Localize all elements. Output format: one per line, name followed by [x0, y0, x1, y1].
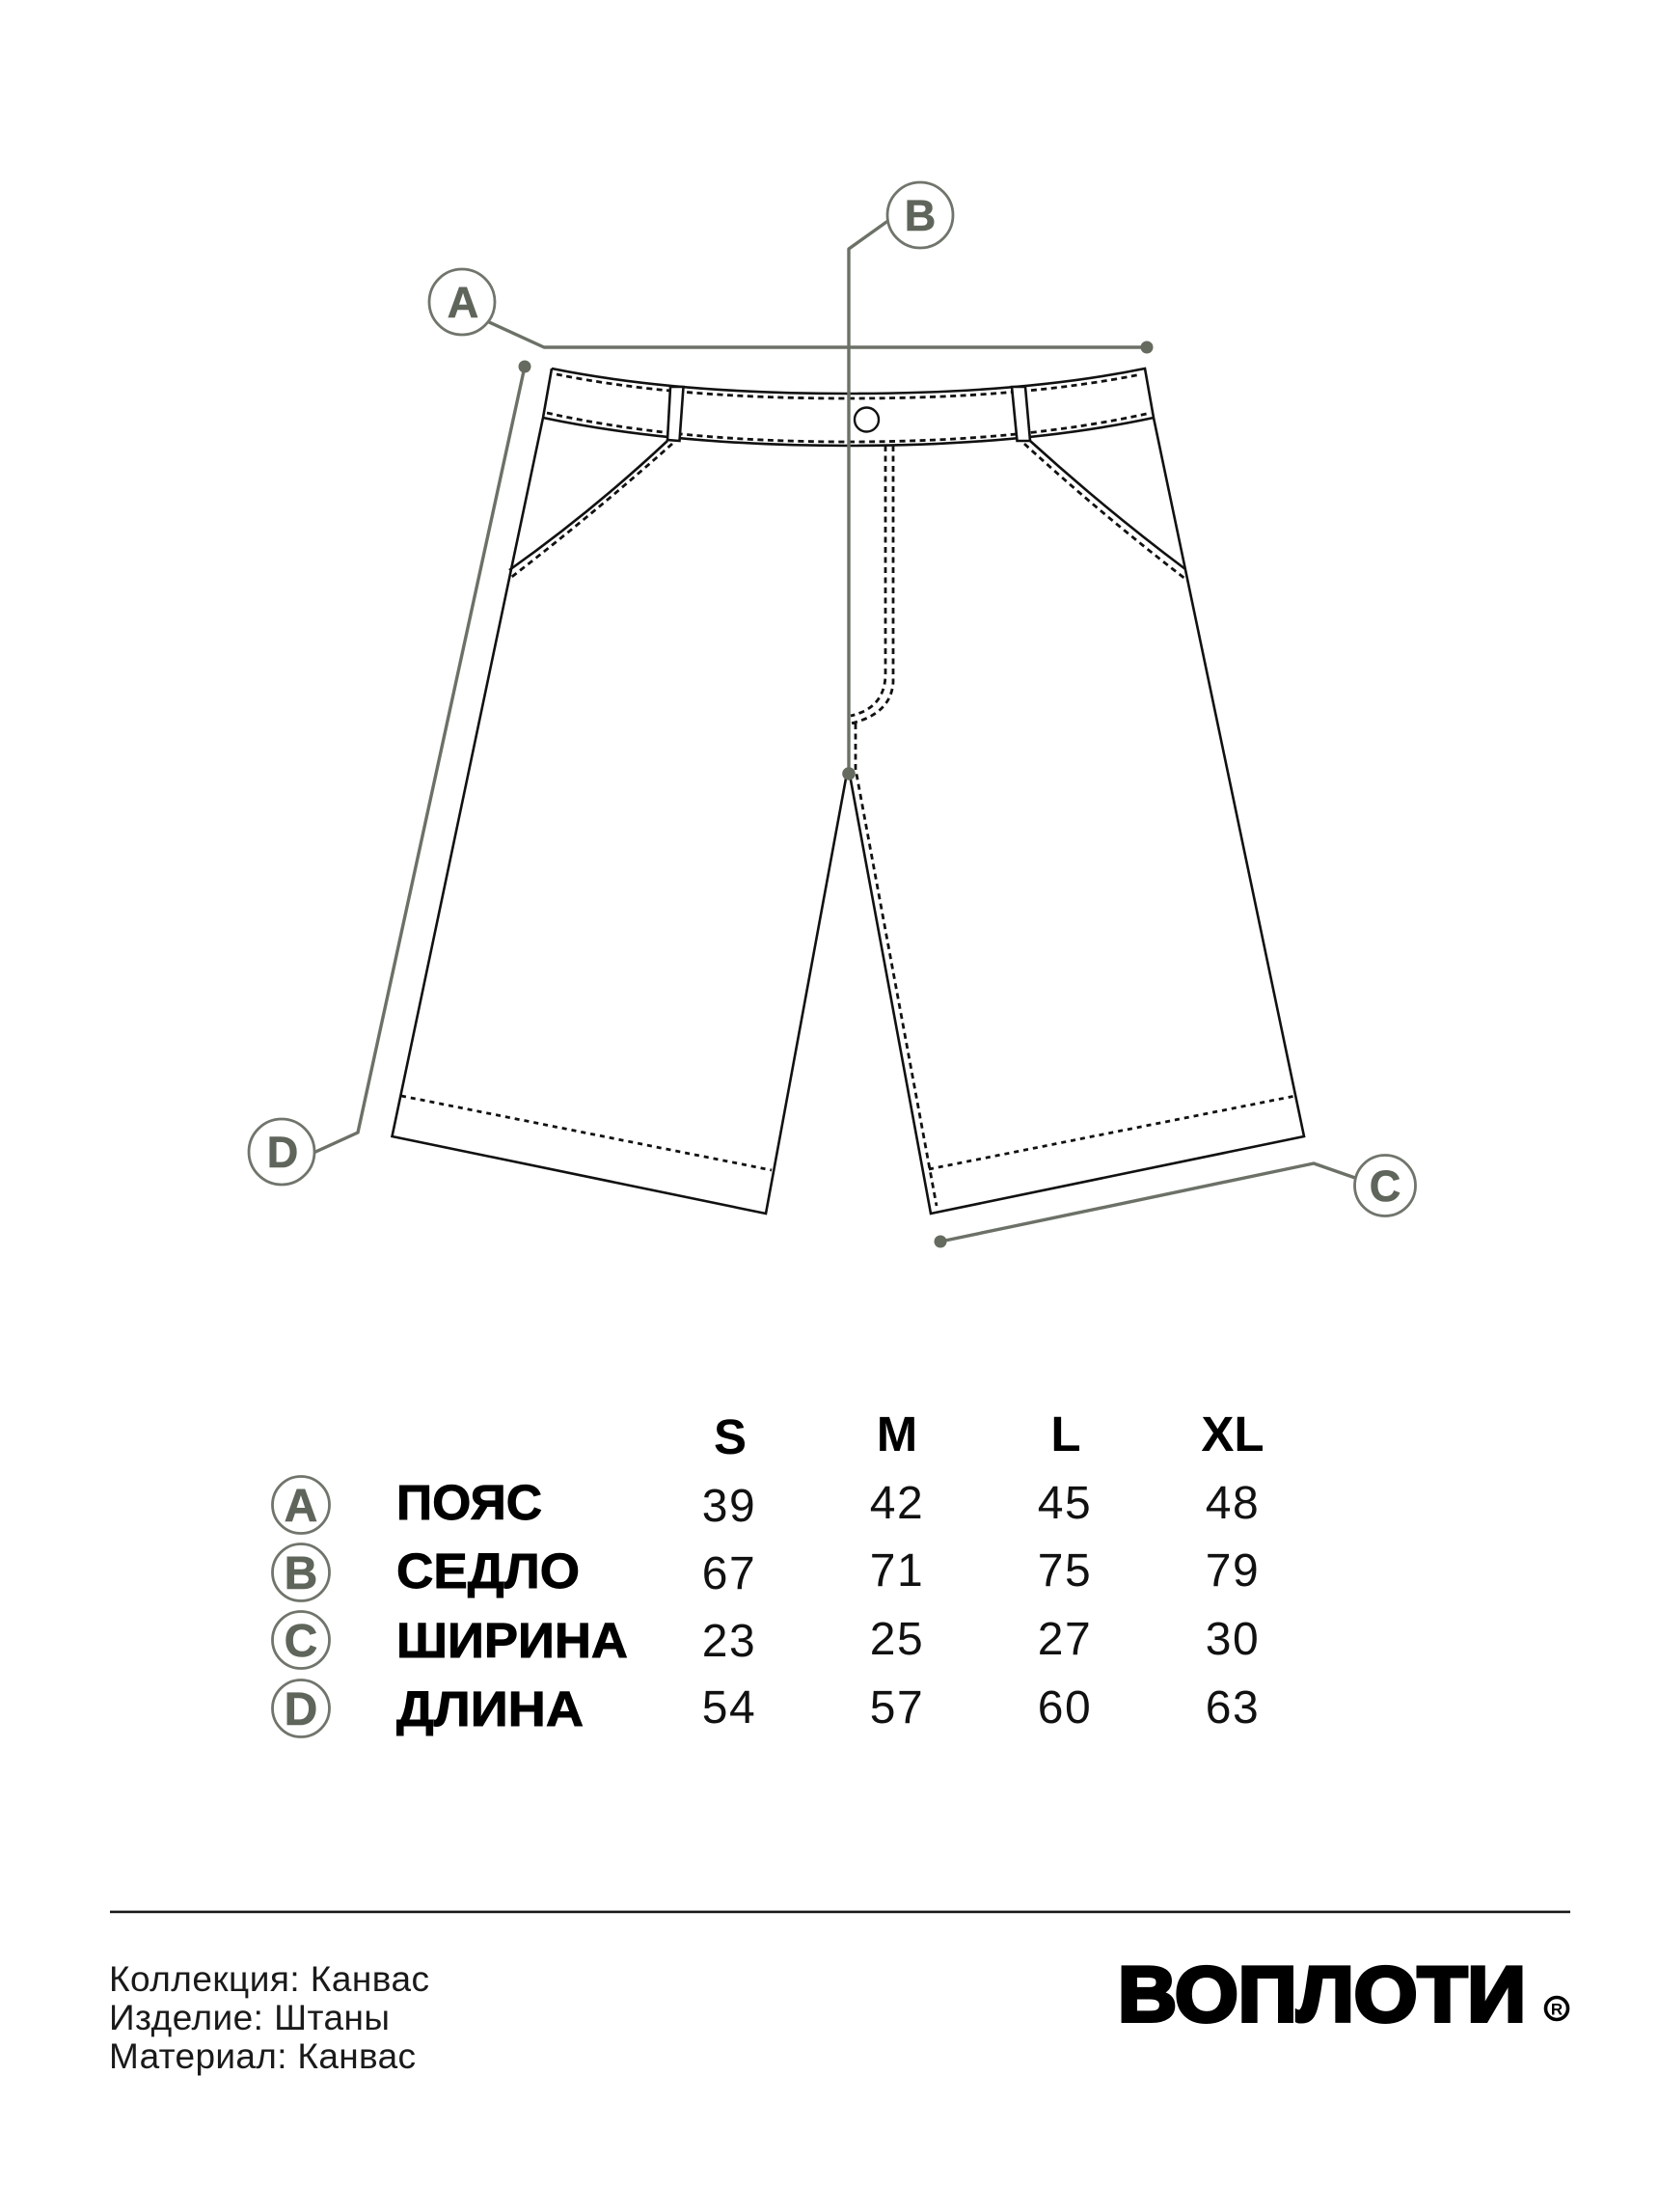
measure D: length: [249, 361, 530, 1185]
row C: width: 25: [870, 1614, 924, 1665]
row C: width: ШИРИНА: [396, 1613, 628, 1668]
row B: rise: B: [285, 1548, 317, 1599]
size headers: [714, 1406, 1265, 1464]
row B: rise: 71: [870, 1545, 924, 1597]
size headers: M: [877, 1406, 917, 1461]
row C: width: 23: [702, 1616, 756, 1667]
row A: waist: 48: [1206, 1478, 1260, 1529]
left pocket: [509, 441, 667, 570]
waistband lower edge: [543, 418, 1154, 446]
right pocket stitching: [1024, 444, 1188, 581]
row A: waist: 45: [1038, 1478, 1092, 1529]
row D: length: ДЛИНА: [396, 1681, 584, 1736]
shorts outline: [392, 369, 1304, 1214]
measure C: leg width: C: [1370, 1161, 1401, 1211]
left hem stitching: [401, 1096, 772, 1170]
right belt loop: [1012, 387, 1030, 441]
row D: length: 63: [1206, 1682, 1260, 1734]
size table: [272, 1406, 1265, 1736]
row A: waist: A: [285, 1481, 317, 1532]
row D: length: D: [285, 1684, 317, 1735]
measure B: rise: [842, 182, 953, 780]
measure A: waist: A: [448, 278, 478, 327]
measure B: rise: B: [905, 191, 936, 240]
row D: length: 60: [1038, 1682, 1092, 1734]
row D: length: 54: [702, 1682, 756, 1734]
size headers: L: [1050, 1406, 1081, 1461]
brand logo: ВОПЛОТИ: [1118, 1952, 1526, 2038]
size headers: S: [714, 1409, 747, 1464]
row A: waist: ПОЯС: [396, 1475, 542, 1530]
button: [855, 407, 879, 432]
row C: width: C: [285, 1616, 317, 1667]
row B: rise: [272, 1543, 1260, 1601]
measure C: leg width: [934, 1156, 1416, 1248]
row D: length: 57: [870, 1682, 924, 1734]
row C: width: 30: [1206, 1614, 1260, 1665]
product info text: [109, 1959, 429, 2076]
row A: waist: 42: [870, 1478, 924, 1529]
row B: rise: 75: [1038, 1545, 1092, 1597]
right pocket: [1030, 441, 1185, 569]
measure A: waist: [429, 269, 1154, 353]
row C: width: [272, 1611, 1260, 1669]
left belt loop: [667, 387, 683, 441]
right hem stitching: [929, 1096, 1295, 1169]
row C: width: 27: [1038, 1614, 1092, 1665]
size headers: XL: [1201, 1406, 1265, 1461]
shorts technical drawing: [392, 369, 1304, 1214]
product info text: Изделие: Штаны: [109, 1998, 390, 2037]
fly stitching: [851, 446, 937, 1206]
waistband stitching: [547, 374, 1151, 442]
left pocket stitching: [509, 444, 672, 579]
product info text: Материал: Канвас: [109, 2036, 416, 2076]
row D: length: [272, 1680, 1260, 1736]
row A: waist: [272, 1475, 1260, 1534]
row B: rise: СЕДЛО: [396, 1543, 580, 1598]
row B: rise: 67: [702, 1548, 756, 1599]
measure D: length: D: [267, 1128, 298, 1177]
row A: waist: 39: [702, 1481, 756, 1532]
brand logo: R: [1551, 2001, 1563, 2018]
row B: rise: 79: [1206, 1545, 1260, 1597]
product info text: Коллекция: Канвас: [109, 1959, 429, 1999]
